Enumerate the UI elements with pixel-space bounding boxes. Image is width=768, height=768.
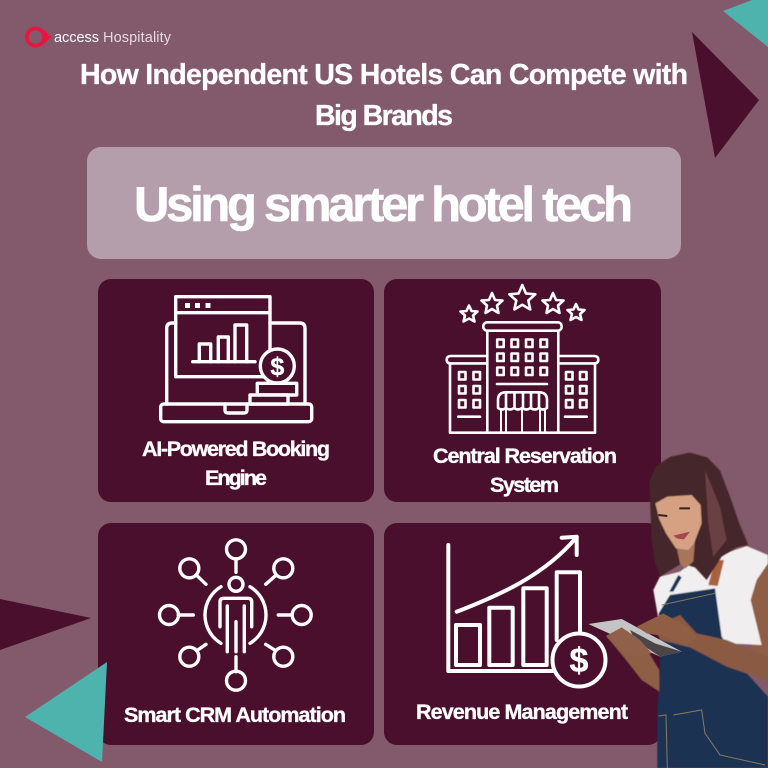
icon: growth chart with coin	[448, 537, 606, 686]
label: System	[490, 473, 559, 497]
brows, eyes and lips	[658, 508, 690, 516]
triangle: top right teal	[723, 0, 768, 47]
label: Revenue Management	[416, 700, 628, 724]
icon: dollar sign: $	[270, 353, 284, 381]
panel: subtitle banner	[87, 147, 681, 259]
apron stitching	[658, 593, 765, 768]
upper arm	[750, 562, 768, 680]
left forearm	[607, 628, 659, 692]
icon: dollar sign: $	[570, 642, 589, 680]
label: Engine	[205, 466, 267, 490]
title: Big Brands	[315, 100, 453, 132]
label	[433, 444, 617, 497]
panel: Revenue Management	[384, 523, 661, 745]
triangle: bottom left teal	[25, 662, 107, 762]
shirt	[653, 546, 768, 645]
logo: access Hospitality	[27, 28, 172, 46]
label	[142, 437, 330, 490]
icon: laptop with chart and coin	[161, 297, 312, 422]
panel: AI-Powered Booking Engine	[98, 279, 374, 502]
forearm	[655, 615, 768, 681]
hand	[606, 627, 652, 657]
neck	[677, 540, 695, 568]
label: AI-Powered Booking	[142, 437, 330, 461]
panel: Smart CRM Automation	[98, 523, 374, 745]
icon: window dots	[185, 303, 210, 308]
hair	[649, 453, 748, 580]
panel: Central Reservation System	[384, 279, 661, 502]
title: How Independent US Hotels Can Compete with	[80, 59, 688, 91]
panel: subtitle banner: Using smarter hotel tech	[134, 178, 633, 232]
icon: customer network	[160, 540, 311, 690]
icon: hotel with stars	[447, 285, 598, 433]
logo: access Hospitality: Hospitality	[103, 30, 172, 46]
title	[80, 59, 688, 132]
label: Central Reservation	[433, 444, 617, 468]
label: Smart CRM Automation	[124, 703, 346, 727]
logo: access Hospitality: access	[54, 30, 99, 46]
face	[655, 495, 702, 550]
apron	[657, 588, 768, 768]
photo: woman using tablet	[588, 453, 768, 768]
hand right	[637, 613, 697, 647]
apron strap	[708, 560, 724, 586]
tablet	[588, 619, 682, 657]
triangle: left dark	[0, 599, 91, 650]
triangle: right dark	[692, 32, 759, 158]
